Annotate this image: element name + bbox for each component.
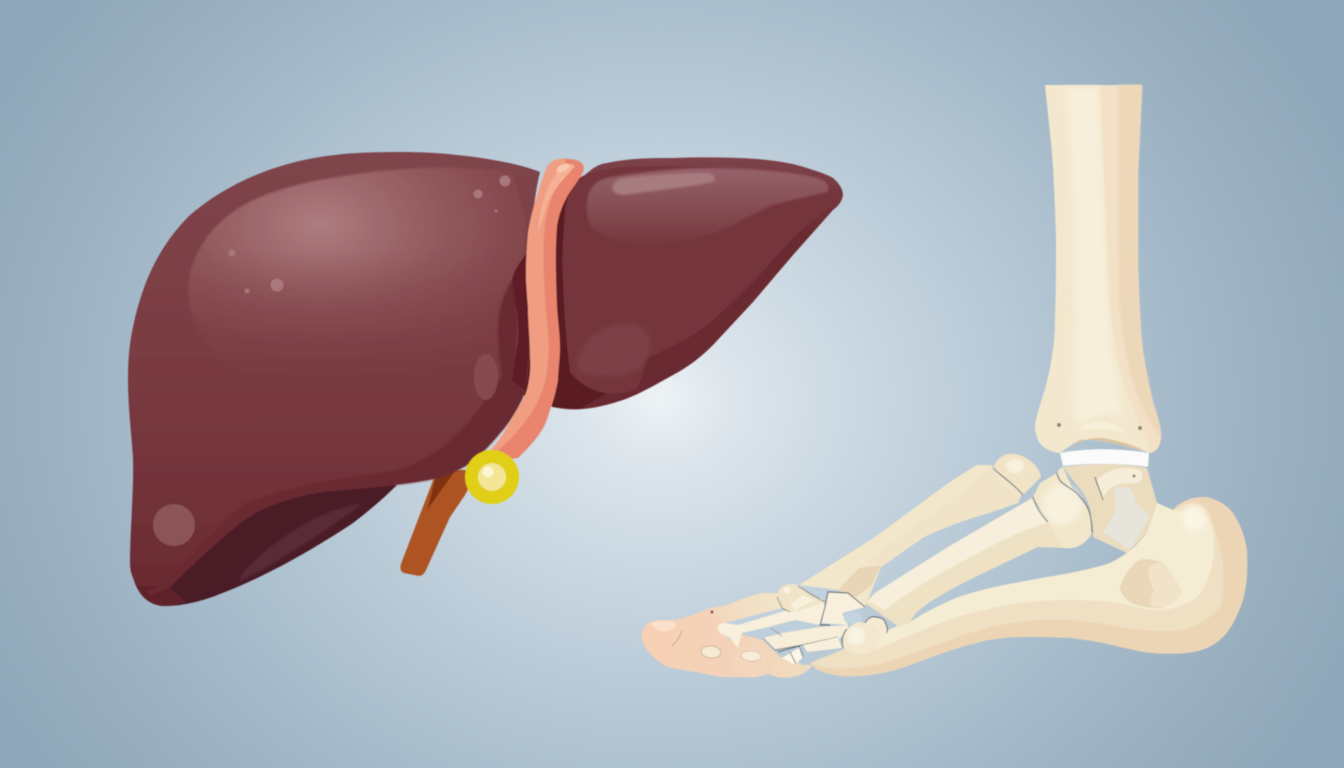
metatarsal head cap	[993, 454, 1041, 495]
foot skeleton	[642, 85, 1247, 678]
tibia	[1035, 85, 1161, 453]
ankle cartilage band	[1060, 449, 1149, 467]
calcaneus and sole	[810, 497, 1247, 676]
bile duct stem	[400, 468, 478, 576]
toes mass	[642, 593, 812, 678]
yellow bile nodule	[465, 450, 519, 504]
talus	[1033, 467, 1092, 548]
liver	[128, 152, 843, 606]
toe bump	[730, 646, 766, 676]
midfoot bones	[820, 592, 887, 654]
liver underside shadow	[132, 480, 397, 606]
long metatarsal	[865, 498, 1091, 627]
hepatic duct	[488, 159, 584, 462]
liver right lobe	[128, 152, 540, 596]
metatarsal shadow patch	[838, 565, 881, 597]
liver left lobe	[510, 157, 843, 409]
liver surface spots	[228, 176, 510, 294]
gap between bones	[844, 612, 862, 624]
cuboid with cartilage patch	[1063, 464, 1157, 553]
phalanges	[717, 584, 848, 665]
upper metatarsal	[799, 465, 1022, 607]
